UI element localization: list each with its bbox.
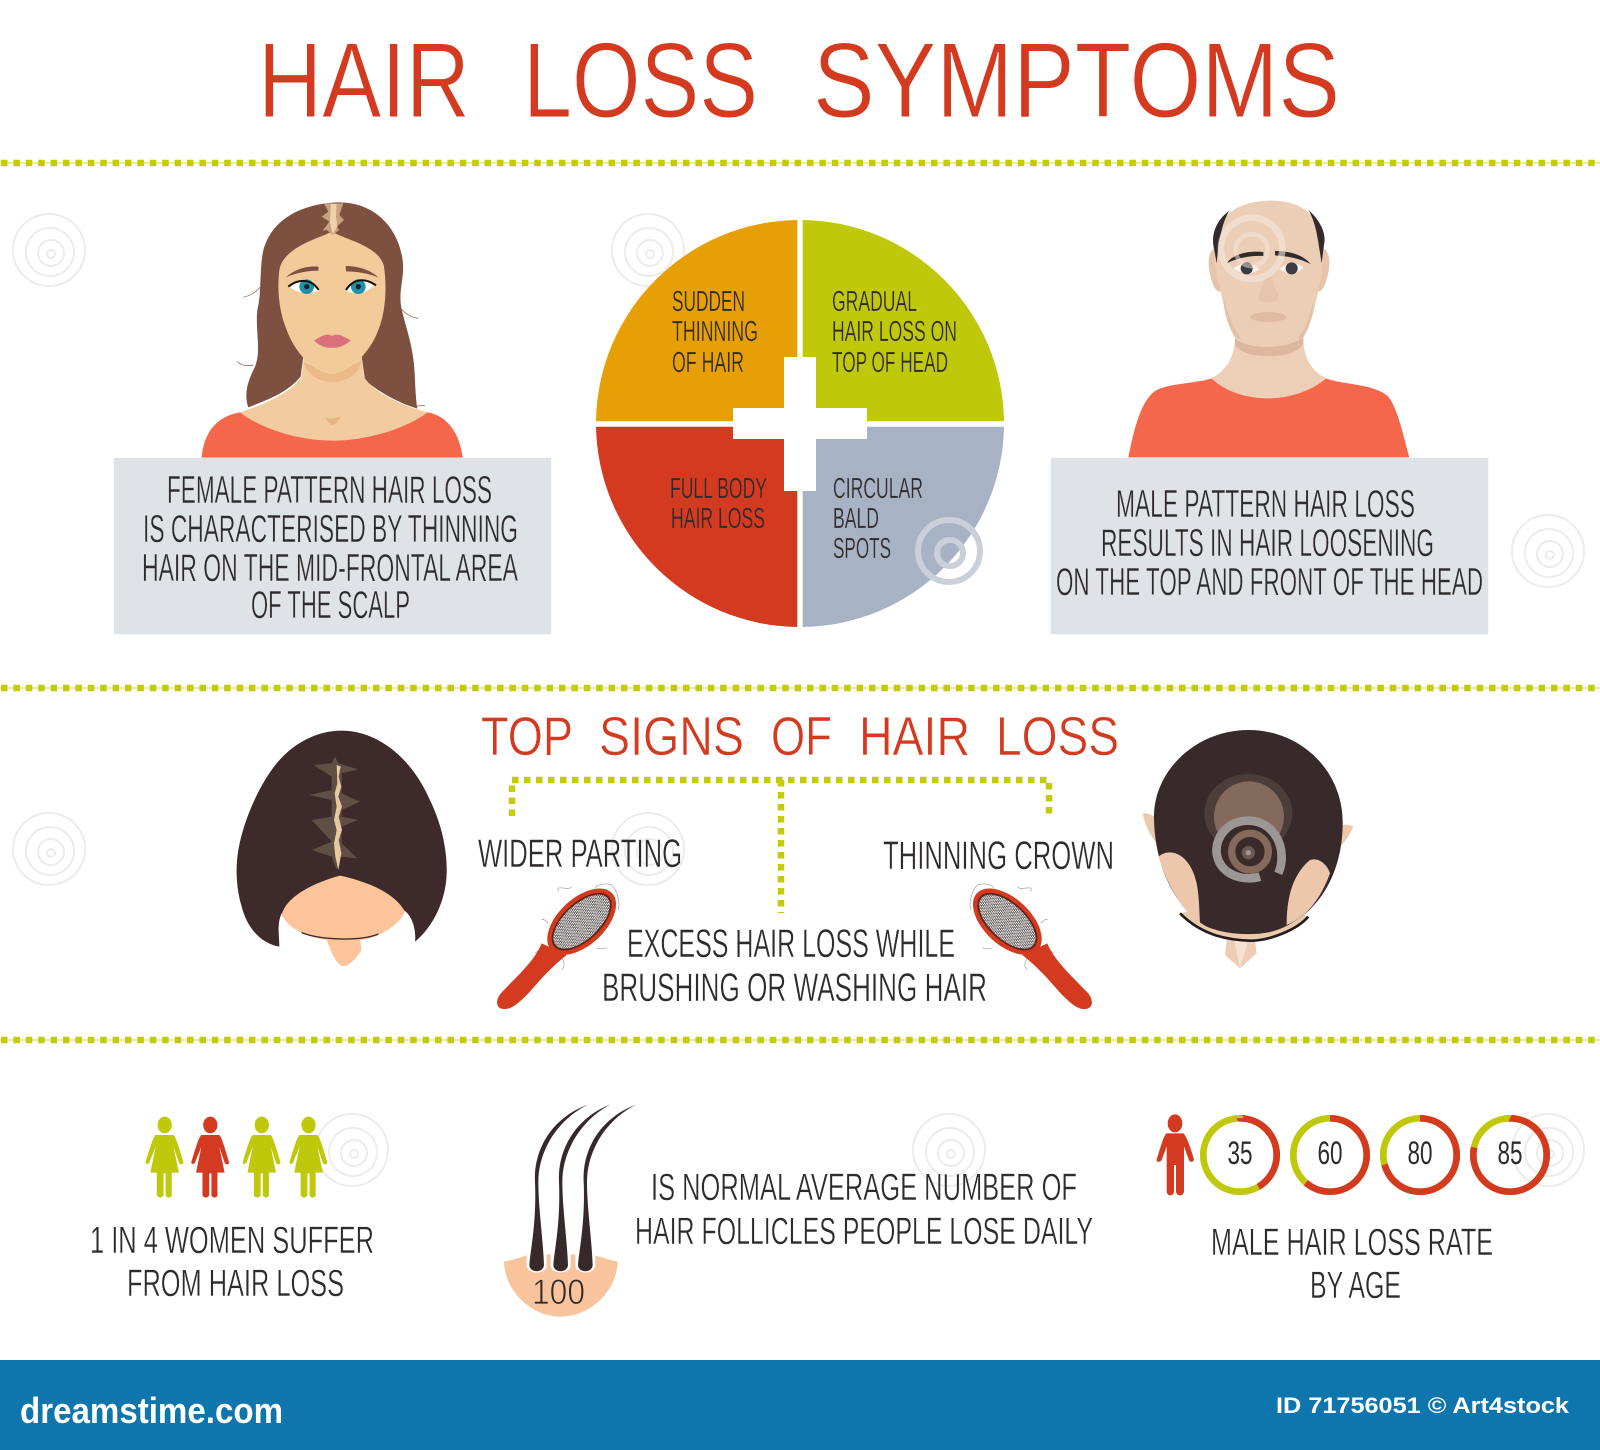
watermark on grey quadrant <box>918 520 980 582</box>
illustration: male head top view <box>1143 730 1353 968</box>
quadrant: sudden thinning <box>596 220 797 421</box>
text: 1 in 4 women <box>90 1220 374 1305</box>
label: sudden <box>672 286 758 379</box>
panel: female pattern text: FEMALE PATTERN HAIR LOSS <box>167 469 492 512</box>
text: 1 in 4 women: FROM HAIR LOSS <box>127 1263 344 1305</box>
heading: top signs: TOP <box>481 705 573 767</box>
panel: male pattern text <box>1051 458 1488 634</box>
icon: right hairbrush <box>961 876 1092 1009</box>
pie chart: four symptom quadrants <box>596 220 1004 627</box>
panel: female pattern text: OF THE SCALP <box>251 584 410 627</box>
illustration: woman portrait <box>202 202 463 458</box>
title: LOSS <box>523 20 758 140</box>
quadrant: full body <box>596 427 797 627</box>
label: gradual: TOP OF HEAD <box>832 347 948 379</box>
text: 1 in 4 women: 1 IN 4 WOMEN SUFFER <box>90 1220 374 1262</box>
icon: hair follicles with 100: 100 <box>532 1273 585 1312</box>
text: excess hair loss: EXCESS HAIR LOSS WHILE <box>627 922 955 966</box>
title: SYMPTOMS <box>813 20 1340 140</box>
label: full body: FULL BODY <box>670 473 767 505</box>
label: full body: HAIR LOSS <box>671 503 765 535</box>
footer logo text: dreamstime.com <box>20 1390 283 1431</box>
icon: left hairbrush <box>497 876 628 1009</box>
ring chart: age 80 <box>1383 1118 1457 1192</box>
white plus <box>733 357 867 491</box>
label: circular: CIRCULAR <box>833 473 923 505</box>
icon: man pictogram <box>1157 1114 1194 1195</box>
text: normal average: IS NORMAL AVERAGE NUMBER OF <box>651 1167 1077 1209</box>
label: sudden: OF HAIR <box>672 347 744 379</box>
footer bar <box>0 1360 1600 1450</box>
footer id text: ID 71756051 © Art4stock <box>1276 1393 1570 1418</box>
ring chart: age 85: 85 <box>1498 1135 1522 1171</box>
heading: top signs <box>481 705 1119 767</box>
ring chart: age 35: 35 <box>1228 1135 1252 1171</box>
label: circular: SPOTS <box>833 533 891 565</box>
connector: dotted bracket <box>512 780 1049 913</box>
icon: woman 2 red <box>191 1117 229 1197</box>
quadrant: circular bald spots <box>803 427 1004 627</box>
panel: female pattern text: IS CHARACTERISED BY THINNING <box>143 508 518 551</box>
text: excess hair loss: BRUSHING OR WASHING HAIR <box>602 966 987 1010</box>
ring chart: age 60: 60 <box>1318 1135 1342 1171</box>
icon: hair follicles with 100 <box>504 1104 637 1317</box>
icon: woman 1 <box>146 1117 184 1197</box>
icon: woman 4 <box>289 1117 327 1197</box>
label: full body <box>670 473 767 535</box>
quadrant: gradual loss <box>803 220 1004 421</box>
heading: top signs: SIGNS <box>599 705 744 767</box>
ring chart: age 35 <box>1203 1118 1277 1192</box>
icon group: women pictograms <box>146 1117 327 1197</box>
label: gradual: GRADUAL <box>832 286 917 318</box>
label: gradual: HAIR LOSS ON <box>832 316 957 348</box>
heading: top signs: HAIR <box>859 705 970 767</box>
label: gradual <box>832 286 957 379</box>
text: excess hair loss <box>602 922 987 1010</box>
text: male hair loss rate: BY AGE <box>1310 1265 1401 1307</box>
label: circular <box>833 473 923 565</box>
panel: female pattern text <box>114 458 551 634</box>
label: wider parting: WIDER PARTING <box>478 832 682 876</box>
text: normal average: HAIR FOLLICLES PEOPLE LOSE DAILY <box>635 1211 1093 1253</box>
label: circular: BALD <box>833 503 879 535</box>
title: HAIR <box>258 20 470 140</box>
heading: top signs: LOSS <box>996 705 1119 767</box>
illustration: man portrait <box>1128 201 1409 457</box>
label: sudden: THINNING <box>672 316 758 348</box>
icon: woman 3 <box>243 1117 281 1197</box>
ring chart: age 85 <box>1473 1118 1547 1192</box>
illustration: female head top view <box>237 731 447 966</box>
label: sudden: SUDDEN <box>672 286 745 318</box>
ring chart: age 80: 80 <box>1408 1135 1432 1171</box>
heading: top signs: OF <box>771 705 832 767</box>
watermark spirals <box>13 214 1584 1186</box>
panel: female pattern text: HAIR ON THE MID-FRONTAL AREA <box>142 547 518 590</box>
title <box>258 20 1340 140</box>
text: male hair loss rate <box>1211 1222 1493 1307</box>
text: normal average <box>635 1167 1093 1253</box>
ring chart: age 60 <box>1293 1118 1367 1192</box>
label: thinning crown: THINNING CROWN <box>883 834 1114 878</box>
